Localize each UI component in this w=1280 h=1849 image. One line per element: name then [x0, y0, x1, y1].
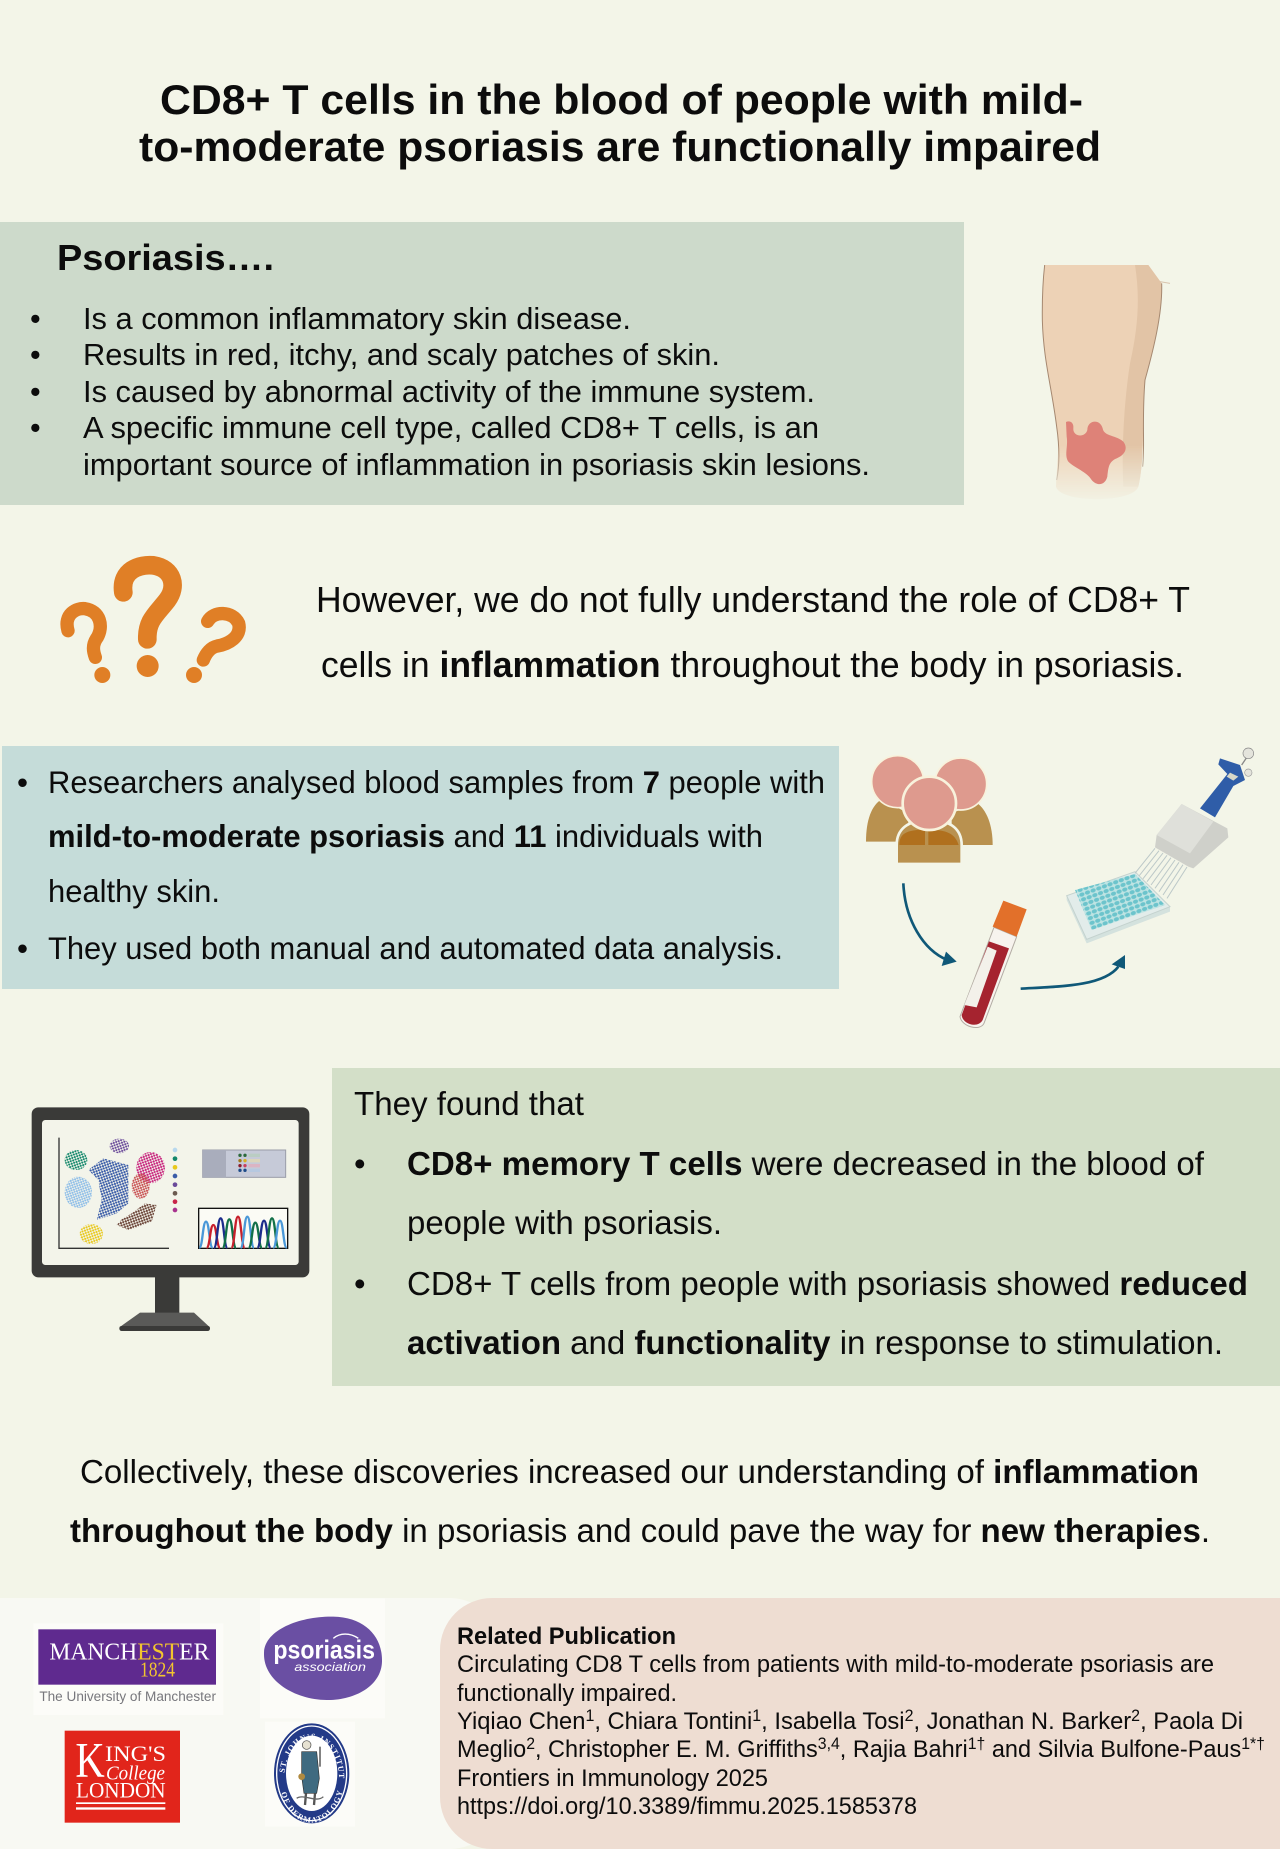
icon: microplate	[1067, 872, 1170, 943]
text: conclusion: Collectively, these discoveries increased our understanding of inflammation	[80, 1453, 1199, 1490]
arrow: tube to plate	[1021, 955, 1125, 989]
citation text: 2	[1131, 1707, 1140, 1725]
bullet list: findings: •	[354, 1265, 366, 1302]
bullet list: psoriasis facts: •	[30, 302, 41, 336]
bullet list: psoriasis facts: important source of inflammation in psoriasis skin lesions.	[83, 448, 870, 482]
logo: University of Manchester	[33, 1623, 223, 1715]
bullet list: psoriasis facts: •	[30, 338, 41, 372]
logo: King's College London: College	[106, 1762, 165, 1784]
bullet list: psoriasis facts: Is caused by abnormal activity of the immune system.	[83, 375, 815, 409]
bullet list: psoriasis facts: •	[30, 375, 41, 409]
bullet list: psoriasis facts: A specific immune cell type, called CD8+ T cells, is an	[83, 411, 819, 445]
citation text: , Christopher E. M. Griffiths	[535, 1736, 818, 1763]
citation text: Meglio	[457, 1736, 529, 1763]
logo: University of Manchester: MANCHESTER	[49, 1639, 209, 1665]
heading: Related Publication: Related Publication	[457, 1623, 676, 1650]
logo: King's College London: LONDON	[76, 1777, 166, 1802]
citation text: , Rajia Bahri	[840, 1736, 968, 1763]
bullet list: psoriasis facts: Results in red, itchy, and scaly patches of skin.	[83, 338, 720, 372]
title: CD8+ T cells in the blood of people with mild-	[160, 76, 1083, 123]
logo: King's College London: K	[75, 1733, 105, 1788]
citation text: https://doi.org/10.3389/fimmu.2025.1585378	[457, 1793, 917, 1820]
citation text: functionally impaired.	[457, 1680, 677, 1707]
citation text: 2	[905, 1707, 913, 1725]
logo: Psoriasis Association: psoriasis	[273, 1634, 375, 1664]
bullet list: findings: CD8+ memory T cells were decreased in the blood of	[407, 1145, 1205, 1182]
bullet list: findings: CD8+ T cells from people with psoriasis showed reduced	[407, 1265, 1248, 1302]
citation text	[457, 1651, 1265, 1820]
icon: blood tube	[960, 901, 1027, 1028]
text: knowledge gap: However, we do not fully understand the role of CD8+ T	[316, 579, 1190, 620]
logo: University of Manchester: The University of Manchester	[39, 1689, 216, 1704]
bullet list: methods: Researchers analysed blood samples from 7 people with	[48, 764, 825, 800]
logo: King's College London: ING'S	[105, 1741, 166, 1766]
citation text: Frontiers in Immunology 2025	[457, 1765, 768, 1792]
bullet list: findings: people with psoriasis.	[407, 1204, 722, 1241]
icon: group of people	[866, 756, 993, 864]
bullet list: methods: healthy skin.	[48, 873, 220, 909]
citation text: and Silvia Bulfone-Paus	[985, 1736, 1241, 1763]
icon: leg with psoriasis patch	[1042, 265, 1170, 499]
icon: question marks	[67, 565, 239, 683]
citation text: 1†	[968, 1735, 985, 1753]
title	[139, 76, 1101, 170]
bullet list: methods	[17, 764, 825, 966]
panel: logos	[0, 1598, 470, 1849]
citation text: , Isabella Tosi	[761, 1708, 905, 1735]
title: to-moderate psoriasis are functionally impaired	[139, 123, 1101, 170]
icon: multichannel pipette	[1135, 748, 1254, 898]
bullet list: psoriasis facts	[30, 302, 870, 482]
citation text: 1	[585, 1707, 594, 1725]
bullet list: findings: activation and functionality in response to stimulation.	[407, 1324, 1223, 1361]
citation text: 1	[752, 1707, 761, 1725]
bullet list: psoriasis facts: •	[30, 411, 41, 445]
logo: St John's Institute of Dermatology: OF DERMATOLOGY	[282, 1790, 342, 1823]
bullet list: findings: •	[354, 1145, 366, 1182]
bullet list: methods: •	[17, 764, 28, 800]
text: conclusion: throughout the body in psoriasis and could pave the way for new therapies.	[70, 1512, 1210, 1549]
citation text: , Jonathan N. Barker	[913, 1708, 1131, 1735]
logo: University of Manchester: 1824	[140, 1660, 175, 1682]
logo: Psoriasis Association	[260, 1598, 385, 1718]
text: conclusion	[70, 1453, 1210, 1549]
bullet list: findings	[354, 1145, 1248, 1361]
icon: gel slide	[203, 1150, 286, 1177]
logo: Psoriasis Association: association	[294, 1660, 366, 1674]
icon: skin lesion patch	[1066, 421, 1126, 484]
citation text: 2	[526, 1735, 535, 1753]
citation text: 1*†	[1241, 1735, 1265, 1753]
chart: cell cluster scatter plot	[59, 1138, 177, 1248]
illustration: sampling workflow	[866, 748, 1254, 1028]
panel: related publication	[440, 1598, 1280, 1849]
logo: St John's Institute of Dermatology: ST. JOHN'S INSTITUTE	[280, 1734, 344, 1778]
citation text: Circulating CD8 T cells from patients with mild-to-moderate psoriasis are	[457, 1651, 1214, 1678]
bullet list: methods: mild-to-moderate psoriasis and 11 individuals with	[48, 818, 763, 854]
arrow: people to tube	[903, 883, 957, 966]
text: knowledge gap	[316, 579, 1190, 685]
citation text: 3,4	[818, 1735, 840, 1753]
icon: computer monitor with data plots	[32, 1107, 309, 1331]
heading: Psoriasis: Psoriasis….	[57, 237, 274, 278]
citation text: , Chiara Tontini	[594, 1708, 752, 1735]
citation text: Yiqiao Chen	[457, 1708, 590, 1735]
panel: methods	[2, 746, 839, 989]
logo: King's College London	[65, 1731, 180, 1823]
bullet list: methods: •	[17, 930, 28, 966]
logo: St John's Institute of Dermatology	[274, 1723, 350, 1824]
bullet list: methods: They used both manual and automated data analysis.	[48, 930, 783, 966]
chart: sequencing chromatogram	[199, 1208, 288, 1248]
bullet list: psoriasis facts: Is a common inflammatory skin disease.	[83, 302, 631, 336]
panel: psoriasis definition	[0, 222, 964, 505]
text: knowledge gap: cells in inflammation throughout the body in psoriasis.	[321, 644, 1184, 685]
heading: They found that: They found that	[354, 1085, 584, 1122]
panel: findings	[332, 1068, 1280, 1386]
citation text: , Paola Di	[1140, 1708, 1243, 1735]
